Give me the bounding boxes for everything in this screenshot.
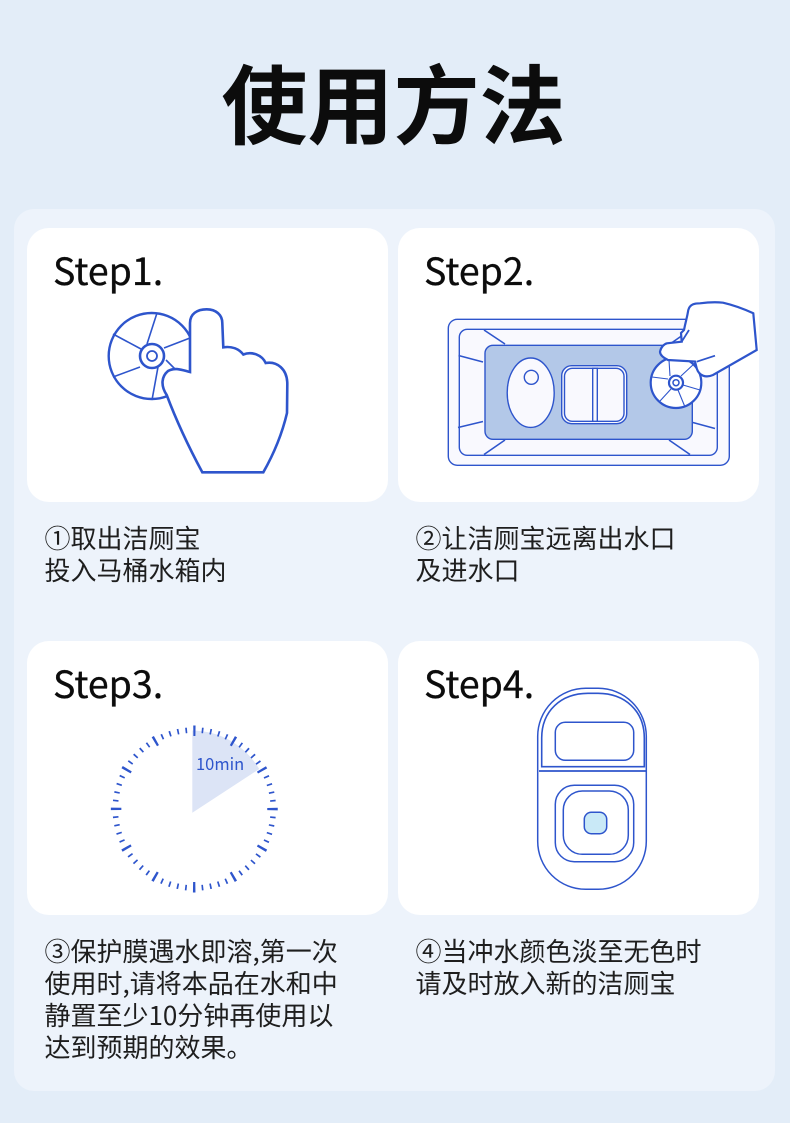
text: step 1 instructions: ①取出洁厕宝: [44, 519, 201, 556]
icon: toilet tank from above with disc and hand: [448, 302, 757, 465]
icon: timer dial with 10 minute wedge: [115, 730, 273, 888]
panel: step 3 card: [27, 641, 388, 915]
title: 使用方法: [222, 37, 566, 162]
text: step 3 instructions: 静置至少10分钟再使用以: [44, 996, 333, 1033]
text: step 3 instructions: 达到预期的效果。: [44, 1028, 253, 1065]
text: step 4 instructions: 请及时放入新的洁厕宝: [416, 964, 676, 1001]
heading: step 3: Step3.: [53, 654, 163, 709]
panel: step 1 card: [27, 228, 388, 502]
heading: step 4: Step4.: [424, 654, 534, 709]
text: step 3 instructions: ③保护膜遇水即溶,第一次: [44, 932, 338, 969]
icon: hand holding disc: [109, 309, 287, 472]
heading: step 2: Step2.: [424, 241, 534, 296]
text: step 1 instructions: [44, 519, 227, 588]
text: step 3 instructions: [44, 932, 338, 1065]
text: step 4 instructions: [416, 932, 702, 1001]
panel: step 2 card: [398, 228, 759, 502]
text: step 4 instructions: ④当冲水颜色淡至无色时: [416, 932, 702, 969]
text: step 2 instructions: [416, 519, 676, 588]
heading: step 1: Step1.: [53, 241, 163, 296]
text: step 3 instructions: 使用时,请将本品在水和中: [44, 964, 338, 1001]
text: step 2 instructions: 及进水口: [416, 551, 520, 588]
icon: timer dial with 10 minute wedge: 10min: [196, 751, 244, 775]
panel: steps background: [14, 209, 775, 1091]
panel: step 4 card: [398, 641, 759, 915]
icon: toilet seen from above: [538, 688, 646, 889]
text: step 1 instructions: 投入马桶水箱内: [44, 551, 227, 588]
text: step 2 instructions: ②让洁厕宝远离出水口: [416, 519, 676, 556]
